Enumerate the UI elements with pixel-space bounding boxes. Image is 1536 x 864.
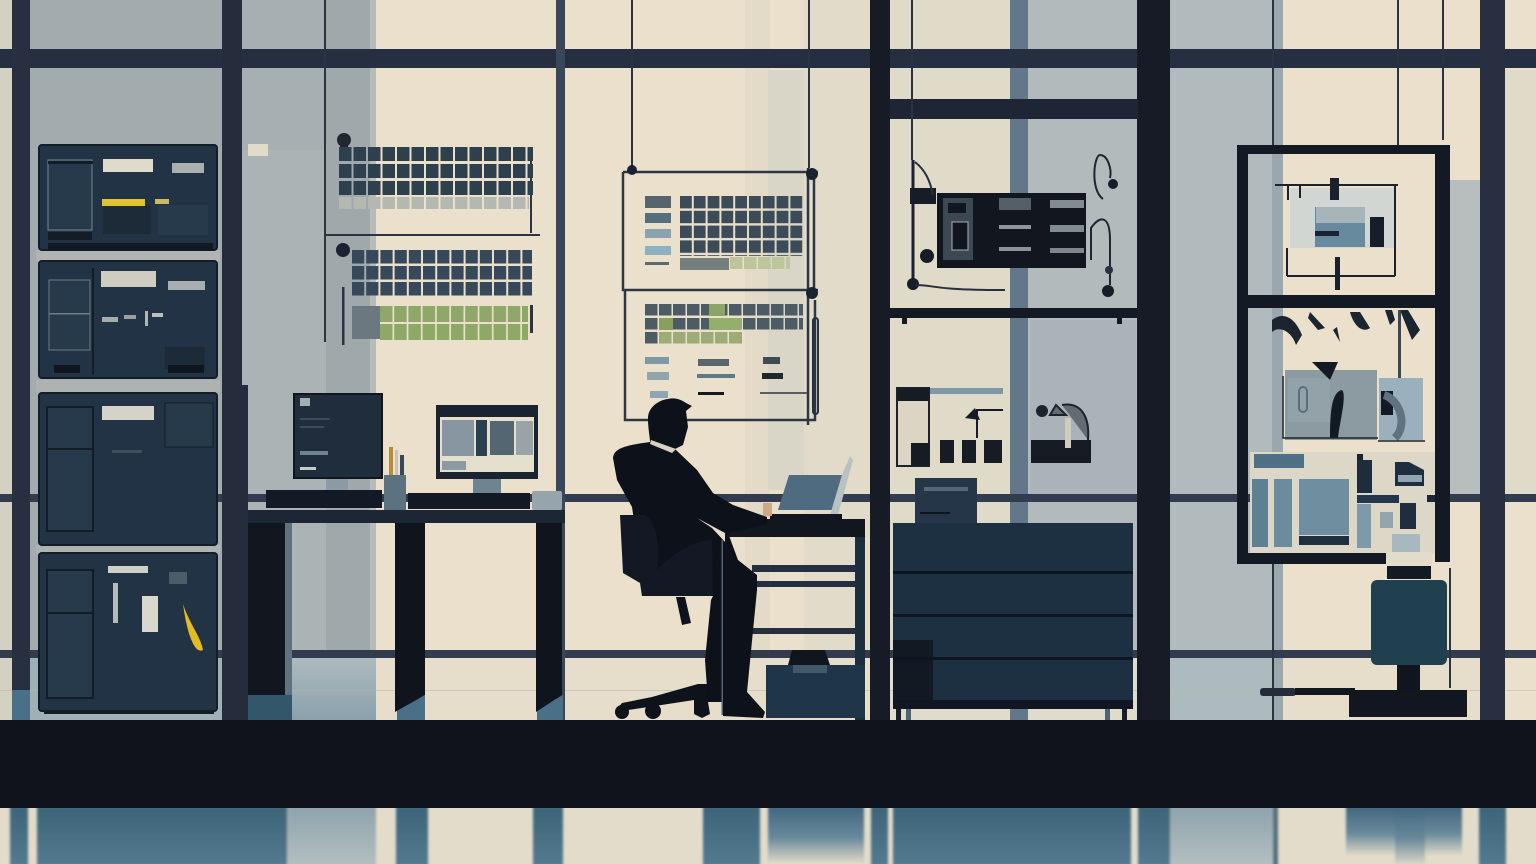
column foreground shadow detail [240, 385, 248, 720]
lower schematic pictures [897, 388, 1091, 466]
grid: lower board [645, 304, 803, 344]
keyboards [266, 490, 382, 508]
cabinet 1 [39, 145, 217, 250]
chair back and seat [620, 515, 713, 596]
right desk with laptop [726, 456, 865, 720]
grid: lower chart [342, 250, 533, 345]
hooks [1091, 155, 1111, 285]
grid: top board [645, 196, 804, 270]
upper device [1275, 178, 1398, 290]
cabinet 4 [39, 553, 217, 711]
frame bars [1237, 145, 1450, 579]
shelf bar [890, 308, 1138, 324]
monitor right [436, 405, 538, 494]
hanging wires [325, 0, 1450, 720]
body [613, 398, 767, 718]
floor reflection inside the window [0, 658, 1536, 720]
right display frame [1237, 145, 1450, 579]
leg highlight [722, 540, 723, 715]
legend bars [645, 357, 807, 398]
cabinet 3 [39, 393, 217, 545]
right machine on stand [1260, 580, 1467, 717]
box on desk [532, 491, 562, 510]
collar [650, 440, 676, 453]
lower chart tiles [1250, 452, 1435, 566]
gap between arm and thigh [697, 518, 725, 542]
middle devices [1283, 362, 1425, 441]
left desk [243, 394, 565, 720]
grid: top chart [339, 147, 533, 209]
cabinet 2 [39, 261, 217, 378]
right cabinet [893, 478, 1133, 720]
floor band [0, 720, 1536, 808]
foreground floor reflections [0, 806, 1536, 864]
sticky note on pillar [248, 144, 268, 156]
right side schematics [907, 155, 1118, 297]
left filing cabinets [36, 145, 220, 714]
chair base and post [615, 597, 722, 719]
dark schematic panel [937, 193, 1086, 268]
monitor left [294, 394, 382, 494]
seated man and chair [613, 398, 767, 719]
laptop [763, 456, 853, 520]
storage box [766, 650, 865, 718]
wall charts upper left [325, 133, 540, 345]
centre whiteboards [623, 165, 818, 425]
hanging tools [1272, 310, 1420, 380]
pencil cup [384, 447, 406, 510]
